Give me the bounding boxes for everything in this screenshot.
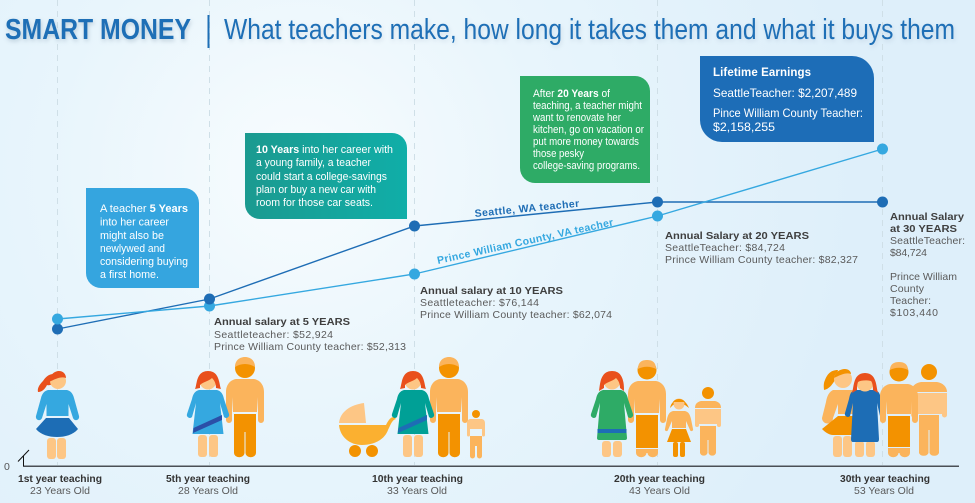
label: 10th year: 33 Years Old [387,485,447,497]
callout: 10 years [245,133,407,219]
axis [4,450,959,473]
annotation: salary at 5 years: Prince William County teacher: $52,313 [214,341,406,353]
son [695,387,721,456]
man [226,357,264,457]
icon: family at 10 years [339,357,485,459]
man one [880,362,918,457]
callout: 5 years [86,188,199,288]
annotation: salary at 30 years: Teacher: [890,295,931,307]
icon: teacher alone [36,371,79,459]
label: 1st year: 23 Years Old [30,485,90,497]
callout: lifetime earnings: Pince William County Teacher: [713,106,863,120]
callout: 20 years: put more money towards [533,136,639,148]
woman ponytail [822,369,864,457]
annotation: salary at 30 years [890,211,965,319]
woman [392,371,434,457]
annotation: salary at 5 years [214,316,406,353]
annotation: salary at 10 years [420,285,612,321]
callout: 10 years: 10 Years into her career with [256,144,393,156]
woman [591,371,633,457]
icon: couple at 5 years [187,357,264,457]
callout: 10 years: a young family, a teacher [256,157,371,169]
line: Seattle teacher [52,196,888,334]
annotation: salary at 30 years: SeattleTeacher: [890,235,965,247]
label: 5th year [166,473,250,497]
callout: 5 years: into her career [100,216,169,228]
label: 5th year: 5th year teaching [166,473,250,485]
callout: 20 years: kitchen, go on vacation or [533,124,644,136]
label: 20th year: 20th year teaching [614,473,705,485]
stroller [339,403,396,457]
annotation: salary at 20 years: SeattleTeacher: $84,724 [665,242,785,254]
annotation: salary at 30 years: County [890,283,925,295]
callout: 10 years: could start a college-savings [256,171,387,183]
label: 5th year: 28 Years Old [178,485,238,497]
line: Prince William County teacher [52,144,888,324]
axis zero label: 0 [4,461,10,473]
label: 1st year: 1st year teaching [18,473,102,485]
callout: lifetime earnings [700,56,874,142]
annotation: salary at 30 years: Annual Salary [890,211,964,223]
annotation: salary at 30 years: $84,724 [890,247,927,259]
title [5,14,955,48]
callout: 20 years [520,76,650,183]
annotation: salary at 30 years: at 30 YEARS [890,223,957,235]
man [430,357,468,457]
daughter [665,398,693,457]
annotation: salary at 20 years: Annual Salary at 20 YEARS [665,230,809,242]
callout: lifetime earnings: Lifetime Earnings [713,67,811,79]
woman blue dress [845,373,885,457]
callout: 5 years: newlywed and [100,243,165,255]
child [467,410,485,459]
callout: lifetime earnings: SeattleTeacher: $2,207,489 [713,86,857,100]
label: 30th year: 53 Years Old [854,485,914,497]
annotation: salary at 20 years: Prince William County teacher: $82,327 [665,254,858,266]
callout: 20 years: college-saving programs. [533,160,640,172]
label: 30th year [840,473,930,497]
annotation: salary at 10 years: Prince William County teacher: $62,074 [420,309,612,321]
label: Prince William line: Prince William County, VA teacher [436,217,614,267]
callout: 10 years: room for those car seats. [256,197,373,209]
label: 20th year [614,473,705,497]
callout: 5 years: a first home. [100,269,159,281]
point: Seattle 5 years [204,294,215,304]
callout: 5 years: A teacher 5 Years [100,203,188,215]
line chart [52,144,888,334]
callout: 10 years: plan or buy a new car with [256,184,376,196]
heading: smart money: SMART MONEY [5,14,191,46]
callout: 20 years: want to renovate her [532,112,621,124]
annotation: salary at 10 years: Annual salary at 10 YEARS [420,285,563,297]
callout: 20 years: After 20 Years of [533,88,611,100]
annotation: salary at 30 years: Prince William [890,271,957,283]
woman [187,371,229,457]
annotation: salary at 10 years: Seattleteacher: $76,144 [420,297,539,309]
label: 1st year [18,473,102,497]
label: 10th year [372,473,463,497]
annotation: salary at 20 years [665,230,858,266]
man [628,360,666,457]
callout: 20 years: those pesky [533,148,584,160]
callout: 20 years: teaching, a teacher might [533,100,642,112]
callout: lifetime earnings: $2,158,255 [713,120,775,134]
label: 20th year: 43 Years Old [629,485,690,497]
icon: family at 30 years [822,362,947,457]
label: Seattle line: Seattle, WA teacher [474,198,580,220]
annotation: salary at 5 years: Annual salary at 5 YEARS [214,316,350,328]
callout: 5 years: considering buying [100,256,188,268]
man two [911,364,947,456]
annotation: salary at 30 years: $103,440 [890,307,938,319]
annotation: salary at 5 years: Seattleteacher: $52,924 [214,329,333,341]
label: 10th year: 10th year teaching [372,473,463,485]
title divider [208,15,210,48]
label: 30th year: 30th year teaching [840,473,930,485]
icon: family at 20 years [591,360,721,457]
callout: 5 years: might also be [100,230,164,242]
